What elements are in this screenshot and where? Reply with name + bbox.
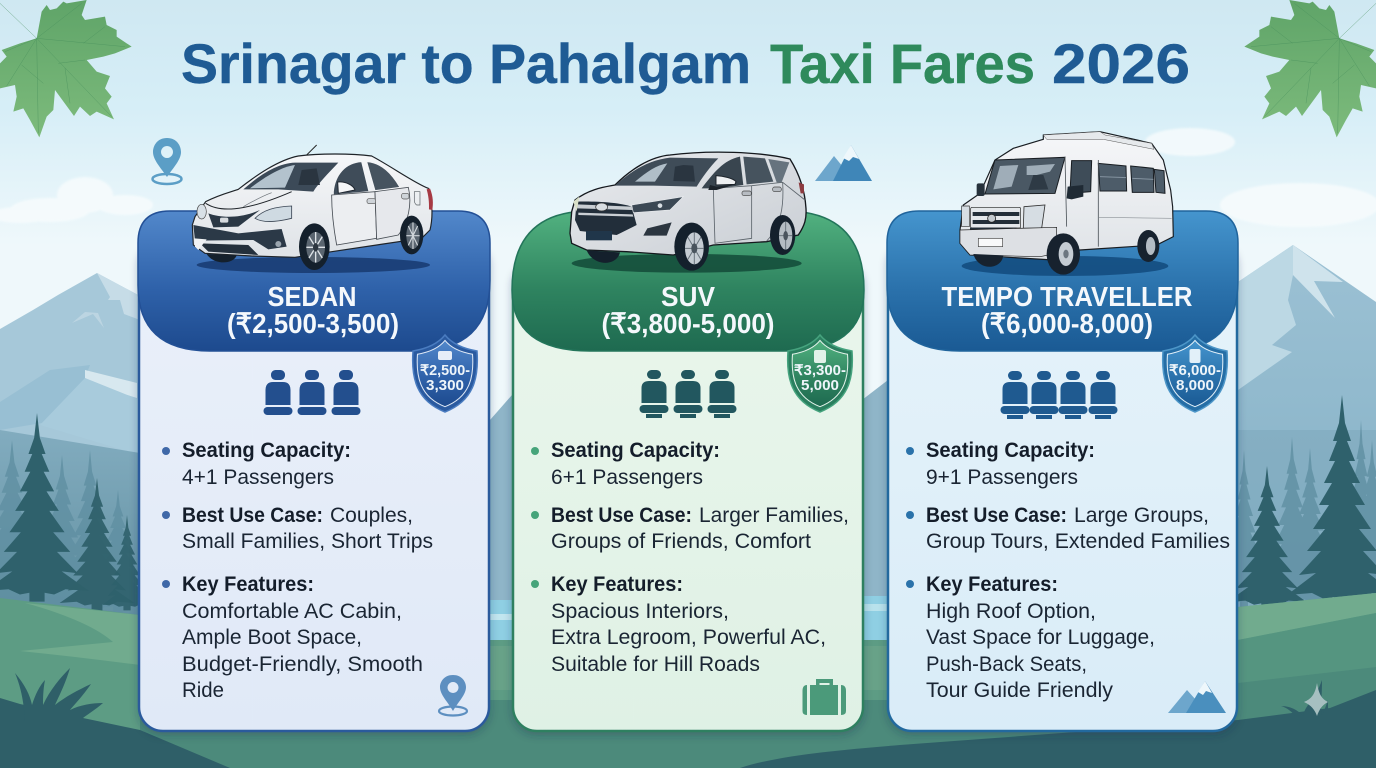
card header bbox=[887, 211, 1238, 351]
title: Srinagar to Pahalgam bbox=[181, 32, 751, 95]
icon: grass tuft right bbox=[1281, 680, 1328, 724]
bullet list: sedan: Best Use Case: bbox=[182, 503, 323, 527]
badge: tempo fare shield bbox=[1163, 335, 1227, 412]
bullet list: tempo traveller: 9+1 Passengers bbox=[926, 465, 1078, 489]
badge: tempo fare shield: 8,000 bbox=[1176, 378, 1214, 394]
bullet list: tempo traveller: Key Features: bbox=[926, 572, 1058, 596]
card header bbox=[512, 211, 864, 351]
bullet list: sedan: 4+1 Passengers bbox=[182, 465, 334, 489]
icon: three seats bbox=[640, 370, 736, 418]
icon: mountains bbox=[1168, 681, 1226, 713]
heading: sedan: SEDAN bbox=[268, 281, 356, 312]
bullet list: sedan: Seating Capacity: bbox=[182, 438, 351, 462]
badge: sedan fare shield: 3,300 bbox=[426, 378, 464, 394]
bullet list: tempo traveller: Seating Capacity: bbox=[926, 438, 1095, 462]
bullet list: suv: Best Use Case: bbox=[551, 503, 692, 527]
background: lake bbox=[490, 596, 888, 646]
icon: maple leaf left bbox=[0, 0, 132, 137]
bullet list: sedan bbox=[162, 438, 433, 702]
background: mountains bbox=[0, 245, 1376, 660]
icon: maple leaf right bbox=[1244, 0, 1376, 137]
icon: three seats bbox=[264, 370, 360, 415]
badge: suv fare shield: 5,000 bbox=[801, 378, 839, 394]
panel: sedan bbox=[138, 145, 490, 731]
icon: grass tuft left bbox=[15, 668, 103, 730]
bullet list: sedan: Ride bbox=[182, 678, 224, 702]
bullet list: suv: Suitable for Hill Roads bbox=[551, 652, 760, 676]
badge: sedan fare shield bbox=[413, 335, 477, 412]
price: tempo traveller: (₹6,000-8,000) bbox=[981, 308, 1153, 339]
panel: tempo traveller bbox=[887, 132, 1238, 731]
bullet list: tempo traveller: Group Tours, Extended Families bbox=[926, 529, 1230, 553]
bullet list: suv: Groups of Friends, Comfort bbox=[551, 529, 811, 553]
heading: tempo traveller: TEMPO TRAVELLER bbox=[942, 281, 1192, 312]
price: sedan: (₹2,500-3,500) bbox=[227, 308, 399, 339]
bullet list: sedan: Small Families, Short Trips bbox=[182, 529, 433, 553]
background: clouds bbox=[0, 128, 1376, 227]
icon: four seats bbox=[1000, 371, 1118, 419]
badge: tempo fare shield: ₹6,000- bbox=[1169, 363, 1221, 379]
badge: suv fare shield bbox=[788, 335, 852, 412]
badge: suv fare shield: ₹3,300- bbox=[794, 363, 846, 379]
bullet list: sedan: Key Features: bbox=[182, 572, 314, 596]
bullet list: suv: Larger Families, bbox=[699, 503, 849, 527]
bullet list: tempo traveller: Best Use Case: bbox=[926, 503, 1067, 527]
bullet list: tempo traveller: Large Groups, bbox=[1074, 503, 1209, 527]
card body bbox=[513, 260, 863, 731]
bullet list: sedan: Couples, bbox=[330, 503, 413, 527]
vehicle: sedan bbox=[192, 145, 433, 273]
bullet list: tempo traveller bbox=[906, 438, 1230, 702]
background: meadow bbox=[0, 593, 1376, 768]
icon: suitcase bbox=[802, 679, 846, 715]
bullet list: suv: Spacious Interiors, bbox=[551, 599, 729, 623]
card body bbox=[888, 240, 1237, 731]
bullet list: tempo traveller: High Roof Option, bbox=[926, 599, 1096, 623]
title: 2026 bbox=[1052, 32, 1190, 95]
bullet list: sedan: Comfortable AC Cabin, bbox=[182, 599, 402, 623]
icon: location pin bbox=[439, 675, 467, 716]
card body bbox=[139, 240, 489, 731]
bullet list: suv: Seating Capacity: bbox=[551, 438, 720, 462]
heading: suv: SUV bbox=[661, 281, 715, 312]
bullet list: tempo traveller: Vast Space for Luggage, bbox=[926, 625, 1155, 649]
badge: sedan fare shield: ₹2,500- bbox=[420, 363, 470, 379]
icon: sparkle bbox=[1304, 683, 1328, 716]
bullet list: suv: Extra Legroom, Powerful AC, bbox=[551, 625, 826, 649]
bullet list: sedan: Ample Boot Space, bbox=[182, 625, 362, 649]
bullet list: suv: 6+1 Passengers bbox=[551, 465, 703, 489]
title bbox=[181, 32, 1190, 95]
background: foreground pines bbox=[0, 395, 1376, 610]
price: suv: (₹3,800-5,000) bbox=[602, 308, 774, 339]
background: distant trees bbox=[0, 420, 1376, 614]
card header bbox=[138, 211, 490, 351]
bullet list: suv bbox=[531, 438, 849, 676]
bullet list: tempo traveller: Push-Back Seats, bbox=[926, 652, 1087, 676]
bullet list: sedan: Budget-Friendly, Smooth bbox=[182, 652, 423, 676]
vehicle: suv bbox=[570, 152, 806, 273]
bullet list: tempo traveller: Tour Guide Friendly bbox=[926, 678, 1113, 702]
panel: suv bbox=[512, 152, 864, 731]
bullet list: suv: Key Features: bbox=[551, 572, 683, 596]
icon: location pin top bbox=[152, 138, 182, 184]
vehicle: tempo traveller bbox=[960, 132, 1173, 276]
icon: mountains top bbox=[815, 145, 872, 181]
title: Taxi Fares bbox=[770, 32, 1035, 95]
